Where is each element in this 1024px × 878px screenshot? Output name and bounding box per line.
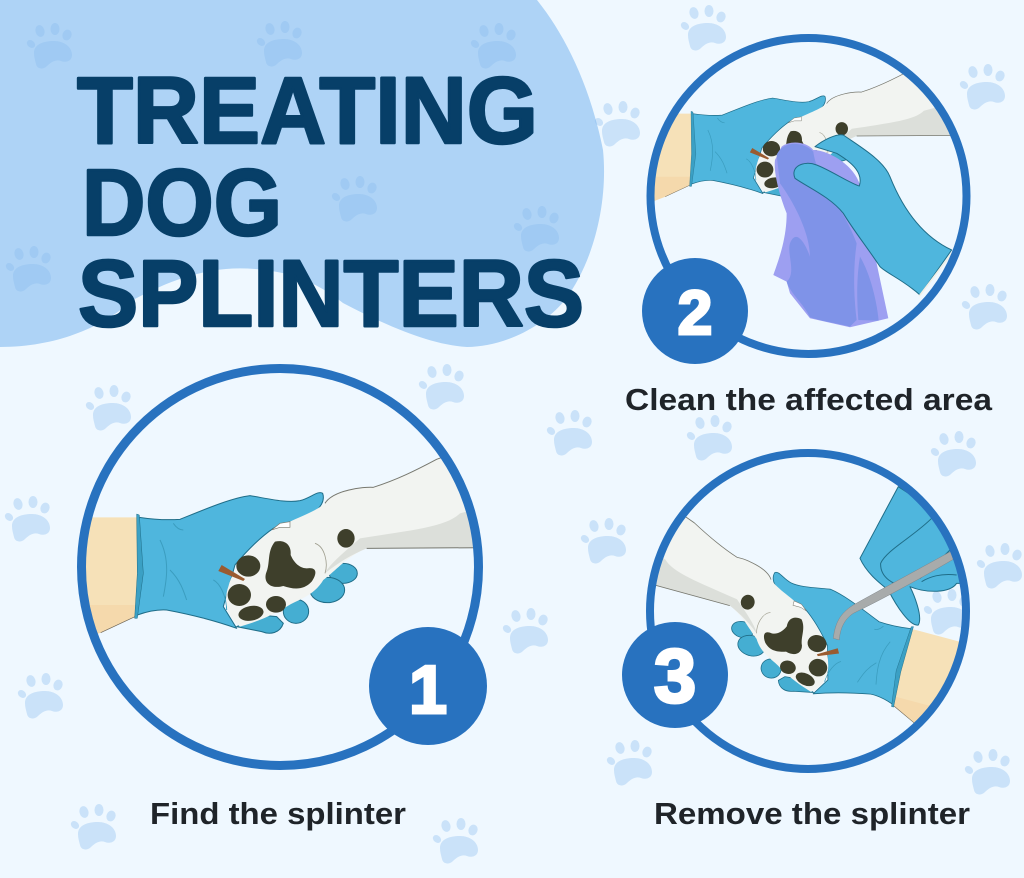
badge 3: 3 — [654, 634, 696, 719]
ring 2 — [650, 38, 966, 354]
label 1: Find the splinter — [150, 796, 406, 831]
ring 3 — [650, 453, 966, 769]
ring 1 — [82, 368, 478, 766]
illustration: gloved hand holding paw — [86, 458, 474, 634]
title blob — [0, 0, 604, 347]
illustration: hand wiping paw with cloth — [578, 44, 986, 327]
panel: step 1 find the splinter — [77, 364, 487, 830]
badge 1 — [369, 627, 487, 745]
title: TREATING — [77, 58, 538, 164]
title: DOG — [82, 150, 282, 256]
badge 3 — [622, 622, 728, 728]
panel: step 2 clean the affected area — [626, 34, 992, 410]
label 2: Clean the affected area — [625, 382, 993, 417]
panel: step 3 remove the splinter — [622, 449, 970, 830]
title: SPLINTERS — [78, 241, 584, 347]
badge 2: 2 — [678, 279, 712, 348]
badge 2 — [642, 258, 748, 364]
label 3: Remove the splinter — [654, 796, 970, 831]
illustration: tweezers removing splinter — [656, 486, 960, 723]
badge 1: 1 — [409, 652, 447, 728]
title — [77, 58, 584, 347]
